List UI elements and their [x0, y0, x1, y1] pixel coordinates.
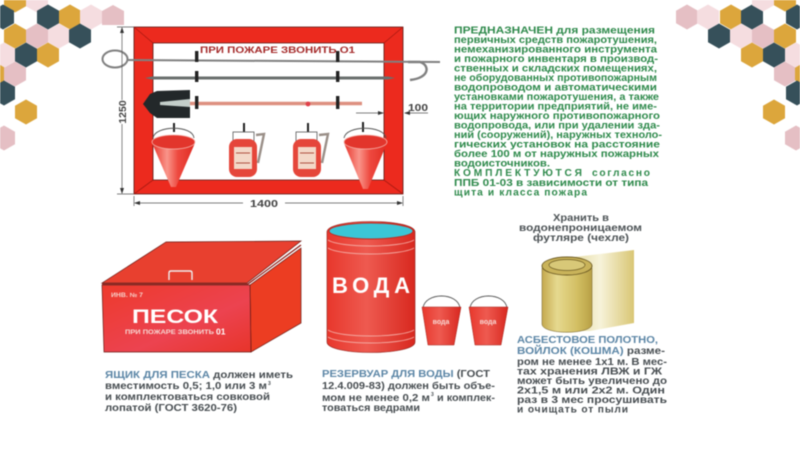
text block: purpose of the fire board: ППБ 01-03 в зависимости от типа [454, 178, 648, 189]
blanket description [517, 335, 667, 416]
blanket description: тах хранения ЛВЖ и ГЖ [517, 366, 663, 378]
rod brackets [195, 51, 339, 109]
reservoir description: мом не менее 0,2 м [322, 393, 430, 404]
text block: purpose of the fire board: и пожарного инвентаря в производ- [454, 54, 658, 65]
storage note: водонепроницаемом [519, 223, 642, 234]
blanket roll [542, 250, 634, 332]
dimension 1250 [117, 27, 134, 194]
sand box description: вместимость 0,5; 1,0 или 3 м [105, 381, 267, 392]
text block: purpose of the fire board: на территории предприятий, не име- [454, 102, 657, 113]
panel: water reservoir [322, 222, 508, 414]
panel: fire board diagram [102, 27, 440, 210]
extinguisher left [229, 123, 264, 177]
blanket description: АСБЕСТОВОЕ ПОЛОТНО, [517, 335, 658, 346]
text block: purpose of the fire board: щита и класса пожара [454, 188, 587, 198]
crowbar rod [145, 76, 395, 80]
blanket description: и очищать от пыли [517, 404, 628, 416]
text block: purpose of the fire board: более 100 м от наружных пожарных [454, 148, 659, 160]
decorative hexagons: top left [0, 0, 124, 150]
decorative hexagons: top right [676, 0, 800, 150]
red frame of the fire board [134, 27, 403, 194]
text block: purpose of the fire board: ственных и складских помещениях, [454, 64, 657, 75]
sand box labels [111, 292, 226, 336]
text block: purpose of the fire board: водоисточников. [454, 159, 550, 170]
blanket description: ВОЙЛОК (КОШМА) разме- [517, 344, 665, 357]
small bucket left [422, 296, 461, 345]
small bucket right: вода [480, 319, 496, 326]
blanket description: ром не менее 1х1 м. В мес- [517, 357, 667, 368]
text block: purpose of the fire board: гических установок на расстояние [454, 140, 660, 151]
sand box description [105, 370, 293, 414]
text block: purpose of the fire board: КОМПЛЕКТУЮТСЯ [454, 168, 582, 179]
blanket description: может быть увеличено до [517, 375, 667, 387]
small bucket left: вода [433, 319, 449, 326]
reservoir description [322, 369, 495, 414]
cone bucket right [344, 122, 387, 189]
water barrel [327, 222, 415, 352]
shovel [143, 90, 362, 118]
extinguisher right [293, 123, 328, 177]
text block: purpose of the fire board: водопровода, или при удалении зда- [454, 121, 660, 132]
dimension 100: 100 [408, 102, 428, 114]
sand box labels: ИНВ. № 7 [111, 292, 144, 299]
sand box description: и комплектоваться совковой [105, 392, 270, 403]
hook rod [102, 50, 440, 80]
text block: purpose of the fire board: ний (сооружений), наружных техноло- [454, 130, 662, 141]
sand box labels: ПРИ ПОЖАРЕ ЗВОНИТЬ [125, 330, 215, 336]
reservoir description: и комплек- [437, 393, 495, 404]
sand box description: 3 [268, 381, 271, 387]
text block: purpose of the fire board: установками пожаротушения, а также [454, 92, 659, 103]
reservoir description: 12.4.009-83) должен быть объе- [322, 380, 495, 392]
board caption: ПРИ ПОЖАРЕ ЗВОНИТЬ О1 [200, 45, 356, 56]
small bucket right [469, 296, 508, 345]
panel: asbestos blanket [517, 213, 667, 416]
sand box illustration [102, 241, 301, 352]
dimension 1250: 1250 [117, 100, 129, 124]
storage note: футляре (чехле) [533, 232, 629, 244]
water barrel: ВОДА [332, 273, 410, 298]
text block: purpose of the fire board: ющих наружного противопожарного [454, 111, 660, 122]
text block: purpose of the fire board: ПРЕДНАЗНАЧЕН для размещения [454, 26, 655, 37]
reservoir description: 3 [431, 392, 434, 398]
storage note: Хранить в [553, 213, 609, 224]
blanket description: 2х1,5 м или 2х2 м. Один [517, 386, 665, 396]
text block: purpose of the fire board: водопроводом и автоматическими [454, 83, 657, 94]
sand box labels: ПЕСОК [132, 307, 219, 328]
blanket description: раз в 3 мес просушивать [517, 395, 667, 406]
panel: sand box [102, 241, 301, 414]
dimension 100 [356, 102, 428, 115]
text block: purpose of the fire board: не оборудованных противопожарным [454, 72, 657, 84]
sand box description: ЯЩИК ДЛЯ ПЕСКА должен иметь [105, 370, 293, 381]
reservoir description: РЕЗЕРВУАР ДЛЯ ВОДЫ (ГОСТ [322, 369, 491, 380]
dimension 1400 [134, 196, 403, 210]
reservoir description: товаться ведрами [322, 403, 420, 414]
sand box labels: 01 [216, 326, 226, 336]
text block: purpose of the fire board: немеханизированного инструмента [454, 45, 657, 56]
text block: purpose of the fire board: первичных средств пожаротушения, [454, 35, 657, 46]
text block: purpose of the fire board: согласно [592, 168, 650, 179]
storage note [519, 213, 642, 244]
sand box description: лопатой (ГОСТ 3620-76) [105, 403, 237, 414]
text block: purpose of the fire board [454, 26, 662, 199]
cone bucket left [152, 123, 195, 187]
dimension 1400: 1400 [250, 198, 278, 210]
